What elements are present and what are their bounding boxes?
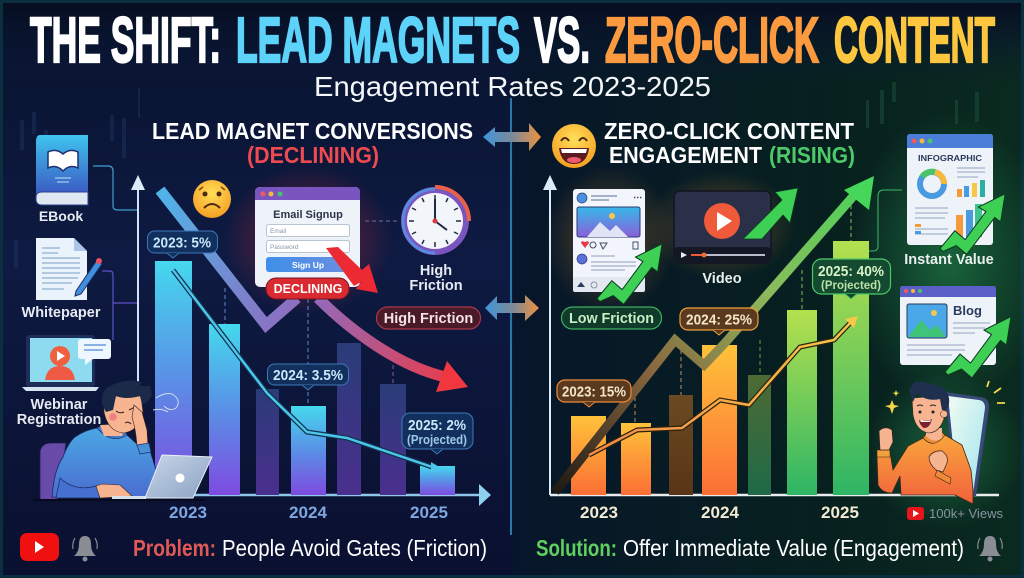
email signup form: Email: [270, 228, 287, 235]
label: high friction: [409, 263, 463, 294]
label: 2025 40% projected: 2025: 40%: [818, 263, 884, 280]
panel: zero-click content engagement: [543, 118, 1011, 522]
footer: youtube icon: [20, 533, 59, 561]
title: VS.: [534, 4, 590, 76]
icon: green arrow blog: [945, 316, 1011, 378]
title: THE SHIFT:: [30, 4, 221, 76]
label: 2023 5%: 2023: 5%: [153, 234, 211, 252]
views badge: 100k+ Views: [929, 506, 1003, 521]
heading: zero-click content engagement: [604, 118, 855, 168]
icon: ebook: [36, 135, 88, 205]
icon: clock: [401, 187, 469, 255]
declining pill: DECLINING: [274, 282, 342, 296]
footer: solution statement: Offer Immediate Value (Engagement): [623, 535, 964, 561]
label: video: Video: [702, 271, 742, 287]
label: webinar registration: [17, 397, 101, 428]
icon: green arrow video: [743, 188, 798, 239]
label: 2024 25%: [680, 308, 758, 335]
icon: whitepaper: [36, 238, 102, 300]
heading: lead magnet conversions: [152, 118, 473, 168]
icon: green arrow infographic: [940, 194, 1005, 254]
label: high friction: Friction: [409, 278, 463, 294]
subtitle: Engagement Rates 2023-2025: [314, 71, 711, 102]
label: ebook: EBook: [39, 208, 83, 224]
email signup form: Sign Up: [292, 260, 324, 270]
icon: social post: [573, 189, 645, 292]
panel: lead magnet conversions: [17, 118, 491, 522]
icon: infographic sheet: [907, 134, 993, 245]
label: 2025 2% projected: (Projected): [407, 433, 467, 447]
person: frustrated at laptop: [33, 381, 212, 500]
label: 2025 40% projected: [812, 259, 890, 299]
footer: bell left: [73, 536, 97, 562]
label: 2025 40% projected: (Projected): [821, 278, 881, 292]
thin trend line: [589, 316, 858, 455]
x axis years right: [580, 504, 859, 522]
icon: blog window: [900, 286, 996, 365]
x axis years left: 2023: [169, 504, 207, 522]
bar chart: [155, 261, 455, 495]
heading: zero-click content engagement: ZERO-CLICK CONTENT: [604, 118, 854, 144]
heading: zero-click content engagement: (RISING): [769, 142, 855, 168]
label: 2023 15%: [557, 380, 631, 407]
icon: laughing emoji: [552, 124, 596, 168]
x axis years left: 2025: [410, 504, 448, 522]
pill: low friction: Low Friction: [569, 311, 654, 327]
label: 2024 25%: 2024: 25%: [686, 312, 752, 328]
label: 2023 15%: 2023: 15%: [562, 384, 626, 400]
label: whitepaper: Whitepaper: [22, 305, 101, 321]
axes: [100, 175, 491, 506]
email signup form: Password: [270, 244, 299, 251]
footer: problem statement: [133, 535, 487, 561]
x axis years right: 2023: [580, 504, 618, 522]
email signup form: [255, 187, 360, 287]
person: celebrating with phone: [877, 381, 1005, 504]
icon: green arrow social: [597, 244, 662, 304]
label: webinar registration: Registration: [17, 412, 101, 428]
x axis years left: 2024: [289, 504, 328, 522]
footer: problem statement: Problem:: [133, 535, 216, 561]
label: webinar registration: Webinar: [31, 397, 88, 413]
big decline arrow: [160, 190, 468, 392]
center arrows: [483, 123, 541, 321]
label: high friction: High: [420, 263, 452, 279]
pill: high friction: High Friction: [384, 311, 473, 327]
icon: infographic sheet: INFOGRAPHIC: [918, 153, 982, 163]
x axis years right: 2025: [821, 504, 859, 522]
label: 2024 3.5%: 2024: 3.5%: [273, 367, 343, 384]
pill: high friction: [376, 307, 480, 329]
label: 2025 2% projected: [402, 413, 473, 454]
pill: low friction: [562, 307, 662, 329]
label: instant value: Instant Value: [904, 252, 994, 268]
icon: sad emoji: [193, 180, 231, 218]
icon: video player: [674, 191, 771, 263]
connector lines: [93, 166, 137, 340]
x axis years left: [169, 504, 448, 522]
icon: webinar laptop: [22, 335, 111, 391]
declining pill: [266, 278, 349, 299]
dashed guides: [635, 190, 902, 423]
heading: lead magnet conversions: LEAD MAGNET CONVERSIONS: [152, 118, 473, 144]
label: 2024 3.5%: [268, 364, 348, 390]
thin trend line: [173, 270, 441, 473]
title: LEAD MAGNETS: [236, 4, 520, 76]
footer: problem statement: People Avoid Gates (Friction): [222, 535, 487, 561]
big rising arrow: [555, 176, 874, 492]
heading: lead magnet conversions: (DECLINING): [247, 142, 379, 168]
title: [30, 4, 995, 76]
footer: solution statement: Solution:: [536, 535, 617, 561]
axes: [543, 175, 999, 495]
x axis years right: 2024: [701, 504, 740, 522]
label: 2023 5%: [148, 231, 218, 258]
heading: zero-click content engagement: ENGAGEMENT: [609, 142, 762, 168]
icon: blog window: Blog: [953, 303, 982, 318]
bar chart: [571, 241, 869, 495]
title: ZERO-CLICK: [605, 4, 819, 76]
red declining arrow: [326, 247, 378, 293]
label: 2025 2% projected: 2025: 2%: [408, 417, 466, 434]
dashed guides: [225, 221, 400, 406]
email signup form: Email Signup: [273, 209, 343, 221]
footer: bell right: [978, 536, 1002, 562]
